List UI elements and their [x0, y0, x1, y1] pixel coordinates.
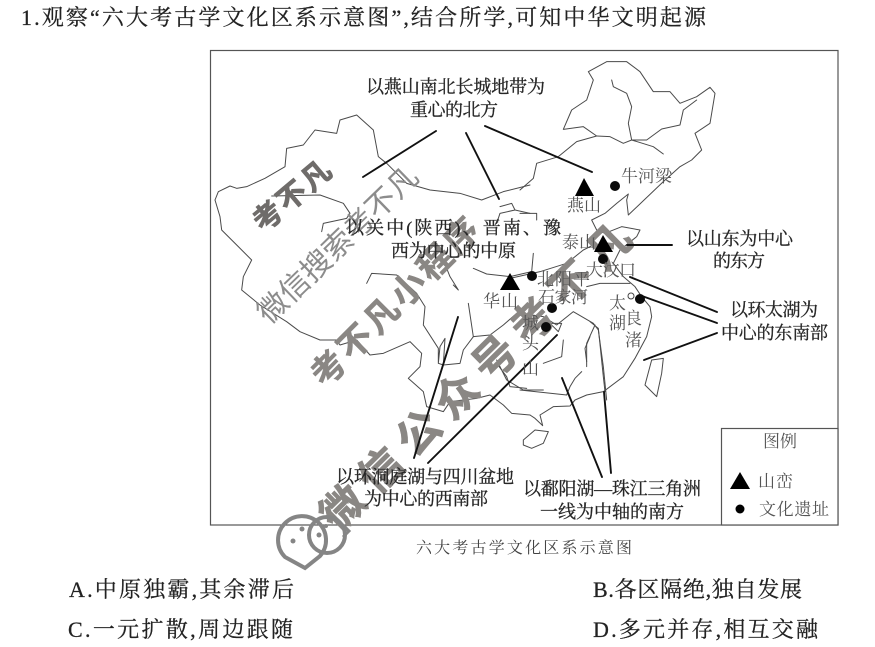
legend: 文化遗址 [759, 500, 829, 519]
region label: south: 以鄱阳湖—珠江三角洲 [523, 479, 701, 499]
site labels: 华山 [483, 292, 518, 311]
option B: B.各区隔绝,独自发展 [593, 577, 802, 602]
site labels: 大汶口 [586, 261, 636, 280]
region label: southwest: 以环洞庭湖与四川盆地 [336, 467, 514, 487]
region label: central plains: 西为中心的中原 [391, 241, 516, 261]
site labels [483, 166, 673, 378]
question heading: 1.观察“六大考古学文化区系示意图”,结合所学,可知中华文明起源 [21, 5, 707, 30]
option C: C.一元扩散,周边跟随 [68, 617, 293, 642]
mountain markers [500, 178, 613, 290]
site labels: 泰山 [562, 233, 596, 252]
option D: D.多元并存,相互交融 [593, 617, 819, 642]
site labels: 北阳平 [537, 270, 590, 289]
region label: southeast: 中心的东南部 [721, 322, 828, 343]
legend [722, 428, 838, 525]
option A: A.中原独霸,其余滞后 [69, 577, 294, 602]
legend: 图例 [763, 432, 797, 451]
region label: southwest: 为中心的西南部 [364, 488, 488, 509]
region label: central plains [346, 217, 561, 261]
watermark: 考不凡小程序: 考不凡小程序 [304, 211, 488, 395]
region label: east: 以山东为中心 [686, 229, 794, 249]
map caption: 六大考古学文化区系示意图 [416, 539, 632, 557]
region label: east [686, 229, 794, 271]
region label: east: 的东方 [713, 251, 765, 271]
site labels: 头 [522, 334, 540, 353]
watermark: 考不凡: 考不凡 [246, 154, 338, 239]
region label: north: 重心的北方 [410, 100, 498, 120]
site labels: 城 [522, 314, 539, 333]
region label: south: 一线为中轴的南方 [540, 501, 684, 522]
site labels: 渚 [625, 331, 642, 350]
watermark: 微信搜索考不凡: 微信搜索考不凡 [251, 161, 425, 330]
site labels: 太 [609, 294, 626, 313]
site labels: 湖 [609, 314, 626, 333]
legend: 山峦 [758, 472, 793, 491]
site labels: 石家河 [538, 288, 588, 307]
watermark: 微信公众号考不凡: 微信公众号考不凡 [312, 215, 642, 541]
region label: southeast: 以环太湖为 [730, 300, 818, 320]
leader lines [363, 126, 717, 477]
site labels: 燕山 [567, 196, 601, 215]
region label: north: 以燕山南北长城地带为 [366, 76, 545, 97]
culture site markers [527, 181, 645, 332]
site labels: 良 [625, 309, 642, 328]
region label: southwest [336, 467, 514, 509]
region label: central plains: 以关中(陕西)、晋南、豫 [346, 217, 561, 239]
region label: southeast [721, 300, 828, 343]
icon: WeChat watermark [278, 516, 349, 568]
site labels: 牛河梁 [621, 166, 673, 186]
region label: south [523, 479, 701, 522]
region label: north [366, 76, 545, 120]
panel: China map outline [215, 62, 715, 448]
site labels: 山 [522, 359, 539, 378]
map frame [210, 50, 838, 525]
